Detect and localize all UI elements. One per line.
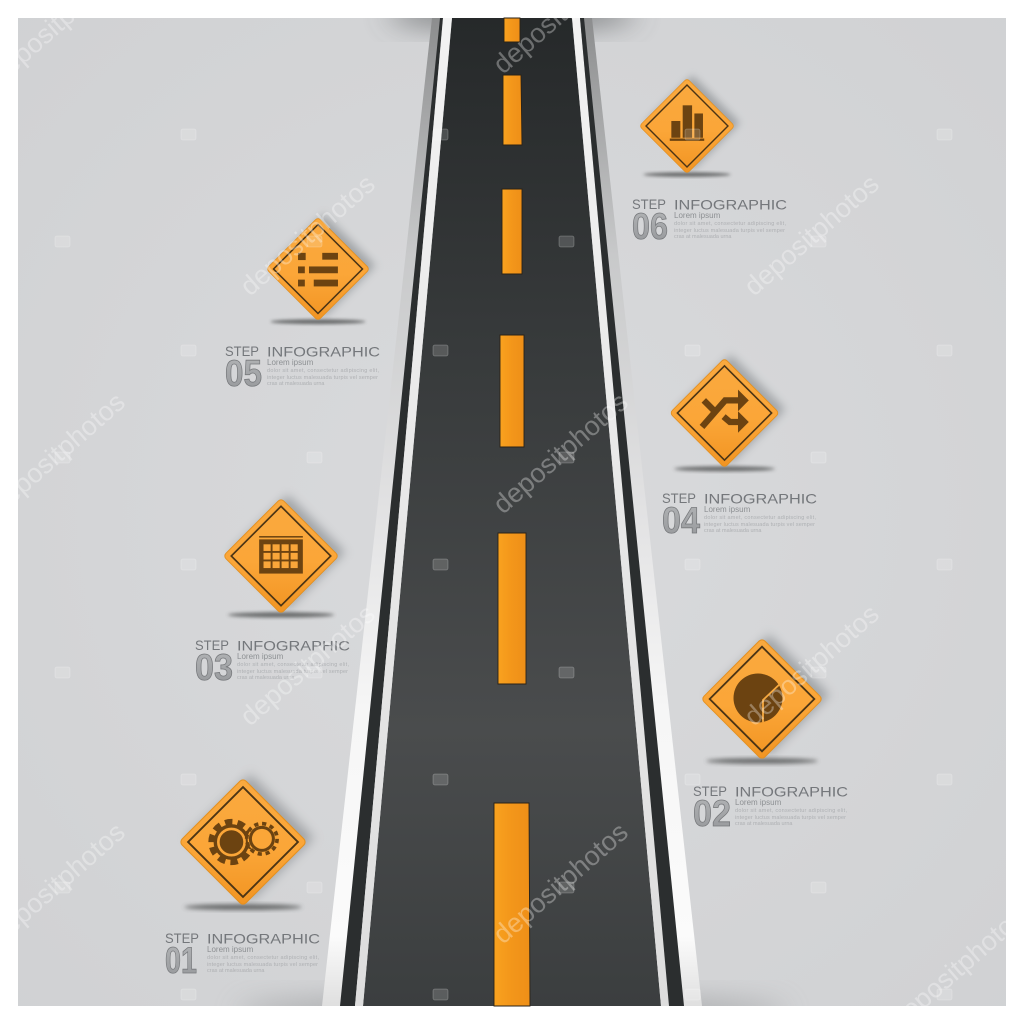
step 03 text: dolor sit amet, consectetur adipiscing elit, bbox=[237, 662, 349, 668]
watermarks: depositphotos bbox=[234, 169, 381, 302]
step 05 text: INFOGRAPHIC bbox=[267, 344, 380, 360]
watermarks: depositphotos bbox=[738, 169, 885, 302]
road bbox=[322, 18, 702, 1006]
step 03 text: INFOGRAPHIC bbox=[237, 638, 350, 654]
icon: gears bbox=[212, 822, 277, 862]
step 06 text: cras at malesuada urna bbox=[674, 234, 732, 240]
step 01 text: integer luctus malesuada turpis vel semper bbox=[207, 962, 318, 968]
step 04 text: Lorem ipsum bbox=[704, 505, 751, 514]
step 01 text: STEP bbox=[165, 930, 199, 946]
step 03 text: 03 bbox=[195, 647, 233, 688]
step 02 text: 02 bbox=[693, 793, 731, 834]
step 03 text: Lorem ipsum bbox=[237, 652, 284, 661]
step 06 text: dolor sit amet, consectetur adipiscing elit, bbox=[674, 221, 786, 227]
icon: pie chart bbox=[734, 674, 782, 722]
step 01 text: Lorem ipsum bbox=[207, 945, 254, 954]
watermark camera marks bbox=[55, 129, 952, 1000]
step 03 text bbox=[195, 637, 350, 688]
step 04 text: INFOGRAPHIC bbox=[704, 490, 817, 506]
step 04 text: STEP bbox=[662, 490, 696, 506]
step 01 text: 01 bbox=[165, 940, 197, 981]
step 06 text bbox=[632, 196, 787, 247]
step 06 text: INFOGRAPHIC bbox=[674, 196, 787, 212]
step 03 text: STEP bbox=[195, 637, 229, 653]
step 04 text: 04 bbox=[662, 500, 700, 541]
step 05 text: Lorem ipsum bbox=[267, 358, 314, 367]
road surface bbox=[363, 18, 661, 1006]
step 04 text bbox=[662, 490, 817, 541]
road shadows bbox=[237, 0, 787, 1024]
step 03 text: cras at malesuada urna bbox=[237, 675, 295, 681]
step 01 text bbox=[165, 930, 320, 981]
right shoulder bbox=[572, 18, 702, 1006]
step 06 text: integer luctus malesuada turpis vel semper bbox=[674, 228, 785, 234]
step 06 text: STEP bbox=[632, 196, 666, 212]
step 02 text: cras at malesuada urna bbox=[735, 821, 793, 827]
step 02 text: dolor sit amet, consectetur adipiscing elit, bbox=[735, 808, 847, 814]
step 05 text: cras at malesuada urna bbox=[267, 381, 325, 387]
step 02 text: INFOGRAPHIC bbox=[735, 784, 848, 800]
left shoulder bbox=[322, 18, 452, 1006]
step 04 sign: shuffle arrows bbox=[670, 355, 786, 471]
right dark edge strip bbox=[580, 18, 684, 1006]
left dark edge strip bbox=[340, 18, 443, 1006]
step 04 text: integer luctus malesuada turpis vel semper bbox=[704, 522, 815, 528]
step 02 text bbox=[693, 783, 848, 834]
step 02 text: STEP bbox=[693, 783, 727, 799]
step 01 text: INFOGRAPHIC bbox=[207, 930, 320, 946]
left white line bbox=[355, 18, 452, 1006]
step 03 sign: calendar bbox=[223, 494, 345, 618]
step 02 text: Lorem ipsum bbox=[735, 798, 782, 807]
step 05 sign: list bbox=[266, 214, 376, 324]
step 04 text: dolor sit amet, consectetur adipiscing elit, bbox=[704, 515, 816, 521]
step 05 text bbox=[225, 343, 380, 394]
watermarks: depositphotos bbox=[234, 599, 381, 732]
icon: shuffle arrows bbox=[702, 390, 749, 433]
icon: calendar bbox=[259, 536, 303, 574]
right white line bbox=[572, 18, 669, 1006]
watermarks: depositphotos bbox=[487, 817, 634, 950]
step 02 sign: pie chart bbox=[701, 634, 830, 764]
step 05 text: STEP bbox=[225, 343, 259, 359]
step 01 text: dolor sit amet, consectetur adipiscing elit, bbox=[207, 955, 319, 961]
step 06 text: Lorem ipsum bbox=[674, 211, 721, 220]
step 01 sign: gears bbox=[179, 774, 314, 910]
step 05 text: 05 bbox=[225, 353, 262, 394]
step 06 text: 06 bbox=[632, 206, 668, 247]
step 03 text: integer luctus malesuada turpis vel semper bbox=[237, 669, 348, 675]
icon: list bbox=[298, 253, 338, 286]
step 05 text: integer luctus malesuada turpis vel semper bbox=[267, 375, 378, 381]
step 05 text: dolor sit amet, consectetur adipiscing elit, bbox=[267, 368, 379, 374]
step 01 text: cras at malesuada urna bbox=[207, 968, 265, 974]
step 02 text: integer luctus malesuada turpis vel semper bbox=[735, 815, 846, 821]
watermarks: depositphotos bbox=[738, 599, 885, 732]
step 06 sign: bar chart bbox=[639, 75, 740, 177]
step 04 text: cras at malesuada urna bbox=[704, 528, 762, 534]
icon: bar chart bbox=[670, 105, 704, 141]
watermarks: depositphotos bbox=[487, 387, 634, 520]
center dashes bbox=[494, 18, 530, 1006]
